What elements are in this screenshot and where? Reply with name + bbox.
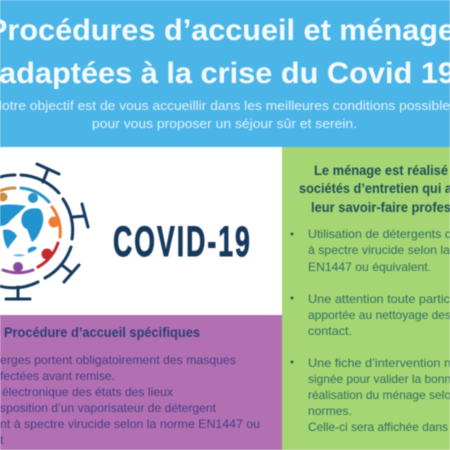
virus outer ring and spikes	[0, 164, 88, 299]
subtitle: Notre objectif est de vous accueillir dans les meilleures conditions possible	[0, 98, 450, 113]
bullet list	[291, 227, 450, 434]
heading	[299, 163, 450, 215]
bullet: fiche d'intervention: signée pour valider la bonn	[308, 372, 450, 386]
title: adaptées à la crise du Covid 19	[0, 57, 450, 90]
panel: ménage	[282, 147, 450, 450]
body text: nt à spectre virucide selon la norme EN1447 ou	[0, 417, 260, 431]
bullet: détergents: EN1447 ou équivalent.	[308, 260, 431, 274]
bullet: nettoyage	[291, 292, 450, 338]
icon: virus globe	[0, 164, 88, 299]
bullet: fiche d'intervention: Celle-ci sera affichée dans	[308, 420, 448, 434]
title: Procédures d’accueil et ménage	[0, 14, 450, 47]
bullet: fiche d'intervention: Une fiche d’intervention n	[308, 356, 450, 370]
body text: fectées avant remise.	[0, 369, 115, 383]
panel: covid logo	[0, 147, 282, 315]
bullet: détergents: Utilisation de détergents c	[308, 227, 450, 241]
subtitle	[0, 98, 450, 131]
bullet: détergents: à spectre virucide selon la	[308, 243, 450, 257]
title	[0, 14, 450, 90]
figures ring	[0, 188, 60, 273]
bullet: nettoyage: apportée au nettoyage des	[308, 308, 450, 322]
bullet: nettoyage: contact.	[308, 324, 352, 338]
covid-19 label: COVID-19	[113, 218, 252, 266]
body text: sposition d’un vaporisateur de détergent	[0, 401, 217, 415]
body text: erges portent obligatoirement des masques	[0, 353, 236, 367]
body text	[0, 353, 260, 447]
body text: électronique des états des lieux	[2, 385, 173, 399]
subtitle: pour vous proposer un séjour sûr et serein.	[92, 116, 357, 131]
bullet: nettoyage: Une attention toute partic	[308, 292, 450, 306]
bullet: fiche d'intervention: réalisation du ménage selo	[308, 388, 450, 402]
panel: header	[0, 0, 450, 147]
heading: Procédure d’accueil spécifiques	[4, 325, 200, 340]
bullet: détergents	[291, 227, 450, 274]
panel: procédure d'accueil	[0, 315, 282, 450]
bullet: fiche d'intervention: normes.	[308, 404, 352, 418]
globe continents	[0, 204, 43, 256]
body text: t	[0, 433, 4, 447]
bullet: fiche d'intervention	[291, 356, 450, 434]
